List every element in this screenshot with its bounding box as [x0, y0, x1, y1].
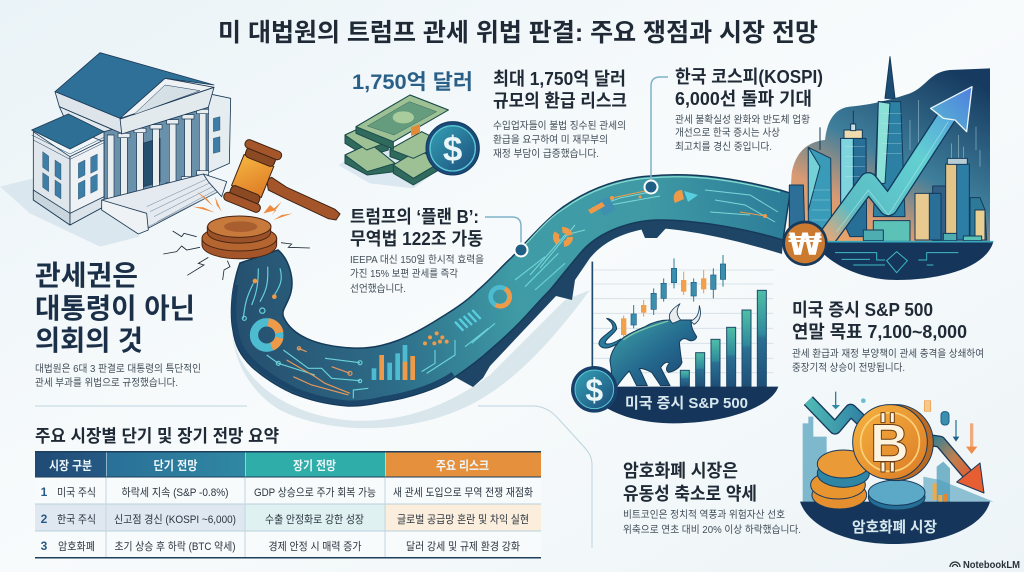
callout: crypto: 비트코인은 정치적 역풍과 위험자산 선호	[623, 508, 785, 521]
table row 1: US stocks: GDP 상승으로 주가 회복 가능	[254, 486, 376, 499]
table row 2: Korean stocks: 한국 주식	[57, 513, 96, 526]
table row 1: US stocks	[35, 478, 541, 504]
headline: tariff power belongs to Congress	[35, 260, 201, 389]
headline: tariff power belongs to Congress: 대법원은 6대 3 판결로 대통령의 특단적인	[35, 363, 201, 375]
won coin	[782, 221, 828, 266]
label: crypto market: 암호화폐 시장	[852, 519, 937, 536]
handle	[267, 177, 340, 220]
dark label base and dollar coin	[571, 366, 778, 423]
label: S&P 500: 미국 증시 S&P 500	[625, 395, 748, 412]
cracks	[163, 231, 310, 280]
callout: refund risk	[493, 69, 627, 160]
callout: refund risk: 수입업자들이 불법 징수된 관세의	[493, 119, 626, 132]
sparks	[193, 192, 293, 220]
road donut chart right	[491, 287, 510, 306]
table row 2: Korean stocks	[35, 504, 541, 531]
outlook summary table	[35, 451, 541, 558]
table row 1: US stocks: 미국 주식	[57, 486, 96, 499]
callout: S&P target: 관세 환급과 재정 부양책이 관세 충격을 상쇄하여	[792, 347, 984, 360]
headline: tariff power belongs to Congress: 대통령이 아닌	[35, 293, 195, 324]
callout: KOSPI: 개선으로 한국 증시는 사상	[675, 127, 780, 139]
illustration: city skyline with rising arrow and won coin: ₩	[788, 227, 822, 262]
circuit traces upper road	[530, 190, 778, 275]
callout: KOSPI: 최고치를 경신 중입니다.	[675, 140, 772, 153]
illustration: city skyline with rising arrow and won coin	[782, 57, 993, 280]
callout: refund risk: 재정 부담이 급증했습니다.	[493, 148, 599, 160]
callout: S&P target	[792, 300, 984, 374]
divider lines	[35, 406, 592, 548]
dark base	[800, 502, 990, 544]
icon: gavel and sound block	[163, 138, 340, 280]
stacked coins	[811, 405, 933, 510]
table header row	[35, 451, 541, 478]
block	[202, 216, 277, 259]
callout: KOSPI	[675, 67, 823, 153]
table row 2: Korean stocks: 2	[41, 512, 48, 526]
road dots and stripes	[253, 279, 481, 345]
table row 3: crypto	[35, 532, 541, 558]
callout: plan B: 선언했습니다.	[350, 283, 406, 295]
icon: money stack and dollar coin: $	[443, 130, 462, 169]
table row 2: Korean stocks: 신고점 경신 (KOSPI ~6,000)	[114, 513, 236, 526]
callout: KOSPI: 6,000선 돌파 기대	[675, 89, 812, 109]
NotebookLM watermark: NotebookLM	[963, 560, 1020, 571]
table header row: 시장 구분	[49, 459, 92, 473]
callout: KOSPI: 한국 코스피(KOSPI)	[675, 67, 823, 87]
head	[223, 138, 283, 214]
leader line: plan B marker	[485, 217, 528, 256]
headline: tariff power belongs to Congress: 관세권은	[35, 260, 138, 291]
table row 1: US stocks: 하락세 지속 (S&P -0.8%)	[122, 485, 228, 499]
dark label base and dollar coin: $	[585, 372, 603, 408]
road shadow	[232, 290, 590, 428]
table row 2: Korean stocks: 글로벌 공급망 혼란 및 차익 실현	[397, 513, 529, 526]
table heading: 주요 시장별 단기 및 장기 전망 요약	[35, 426, 279, 446]
table row 3: crypto: 초기 상승 후 하락 (BTC 약세)	[114, 539, 236, 553]
circuit traces lower road	[242, 253, 565, 398]
table row 3: crypto: 3	[41, 539, 48, 553]
road upper icons	[556, 230, 570, 244]
title: 미 대법원의 트럼프 관세 위법 판결: 주요 쟁점과 시장 전망	[218, 19, 818, 47]
table row 2: Korean stocks: 수출 안정화로 강한 성장	[265, 513, 364, 526]
callout: crypto: 위축으로 연초 대비 20% 이상 하락했습니다.	[623, 523, 801, 536]
road outer rim	[234, 285, 453, 403]
growth bars	[680, 290, 766, 387]
headline: tariff power belongs to Congress: 의회의 것	[35, 325, 143, 356]
headline: tariff power belongs to Congress: 관세 부과를 위법으로 규정했습니다.	[35, 376, 178, 389]
candlesticks	[634, 255, 723, 328]
callout: plan B: 가진 15% 보편 관세를 즉각	[350, 267, 458, 280]
callout: S&P target: 중장기적 상승이 전망됩니다.	[792, 361, 905, 374]
table header row: 단기 전망	[154, 458, 198, 473]
callout: plan B: 트럼프의 ‘플랜 B’:	[350, 207, 479, 227]
table row 3: crypto: 암호화폐	[58, 540, 95, 553]
callout: plan B: 무역법 122조 가동	[350, 229, 483, 249]
table row 1: US stocks: 1	[41, 485, 48, 499]
bull	[599, 304, 700, 386]
icon: money stack and dollar coin	[338, 95, 479, 188]
table header row: 주요 리스크	[436, 459, 489, 473]
callout: crypto: 유동성 축소로 약세	[623, 484, 757, 504]
winding data road	[231, 175, 790, 406]
callout: refund risk: 환급을 요구하여 미 재무부의	[493, 133, 608, 146]
amount label: 1,750억 달러	[352, 71, 473, 94]
illustration: bull market chart	[592, 255, 773, 387]
callout: KOSPI: 관세 불확실성 완화와 반도체 업황	[675, 113, 810, 126]
road donut chart left	[254, 322, 279, 348]
icon: supreme court building	[0, 53, 231, 247]
table row 3: crypto: 경제 안정 시 매력 증가	[268, 540, 362, 553]
road bar chart	[372, 345, 415, 380]
under-road supports	[455, 220, 783, 387]
table row 1: US stocks: 새 관세 도입으로 무역 전쟁 재점화	[393, 486, 533, 499]
bitcoin symbol: B	[870, 414, 909, 473]
callout: plan B	[350, 207, 484, 295]
table header row: 장기 전망	[293, 458, 336, 473]
callout: crypto	[623, 461, 801, 536]
callout: S&P target: 연말 목표 7,100~8,000	[792, 322, 967, 342]
skyline base	[813, 242, 993, 280]
callout: crypto: 암호화폐 시장은	[623, 461, 738, 481]
callout: plan B: IEEPA 대신 150일 한시적 효력을	[350, 253, 484, 266]
callout: refund risk: 최대 1,750억 달러	[493, 69, 626, 89]
leader line: KOSPI marker	[644, 77, 668, 194]
callout: refund risk: 규모의 환급 리스크	[493, 91, 627, 111]
table row 3: crypto: 달러 강세 및 규제 환경 강화	[406, 540, 520, 553]
callout: S&P target: 미국 증시 S&P 500	[792, 300, 933, 320]
illustration: bitcoin coins and falling arrow	[800, 392, 993, 544]
